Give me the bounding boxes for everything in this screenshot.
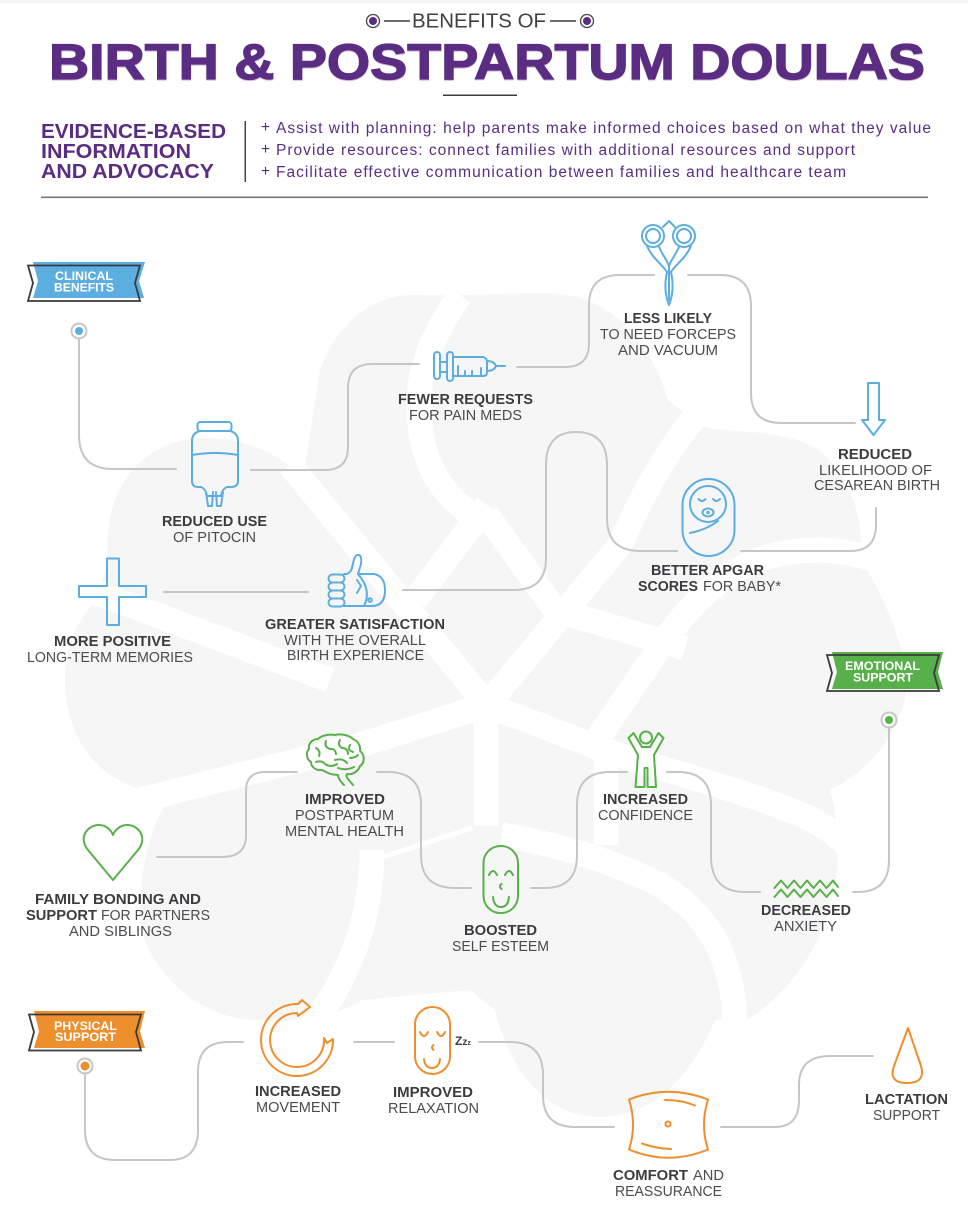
benefit: fewer requests for pain meds [398,352,533,424]
connector path: physical [85,1042,873,1160]
benefit: reduced use of pitocin [162,422,267,546]
label: CONFIDENCE [598,808,693,824]
banner: physical support [29,1011,145,1050]
label: REDUCED [838,447,912,463]
banner: emotional support [827,652,943,691]
benefit: lactation support [865,1028,948,1124]
banner: physical support: PHYSICAL [54,1019,117,1033]
heading: evidence-based information: INFORMATION [41,140,191,163]
icon: brain [307,734,364,785]
icon: heart [84,825,142,880]
label [265,617,445,664]
icon: sleeping face capsule [415,1007,450,1074]
label: LONG-TERM MEMORIES [27,650,193,666]
label [600,311,736,359]
label: MOVEMENT [256,1100,340,1116]
banner: emotional support: SUPPORT [853,670,914,684]
label: LESS LIKELY [624,311,712,327]
label [638,563,781,595]
label [285,792,404,840]
section: clinical benefits [27,221,940,666]
label: MENTAL HEALTH [285,824,404,840]
label: REDUCED USE [162,514,267,530]
label: FOR BABY* [703,579,781,595]
bullet list: Facilitate effective communication between families and healthcare team [276,164,846,181]
benefit: greater satisfaction with the overall birth experience [265,555,445,664]
icon: syringe [434,352,505,381]
label: BOOSTED [464,923,537,939]
icon: pillow [629,1092,708,1158]
icon: down arrow [862,383,885,435]
eyebrow: benefits of: BENEFITS OF [412,10,546,32]
bullet list: + [261,141,270,158]
label [761,903,851,935]
label: WITH THE OVERALL [284,633,426,649]
benefit: decreased anxiety [761,880,851,935]
bullet list: Assist with planning: help parents make informed choices based on what they value [276,120,931,137]
icon: plus cross [79,558,146,625]
label: AND SIBLINGS [69,924,172,940]
benefit: increased confidence [598,732,693,824]
benefit: more positive long-term memories [27,558,193,666]
label: IMPROVED [393,1085,473,1101]
heading: evidence-based information: AND ADVOCACY [41,160,214,183]
icon: iv bag [192,422,238,506]
main heading: BIRTH & POSTPARTUM DOULAS [49,34,925,90]
label [598,792,693,824]
label: TO NEED FORCEPS [600,327,736,343]
label: REASSURANCE [615,1184,722,1200]
title block [49,10,925,96]
label: INCREASED [255,1084,341,1100]
bullet list: + [261,163,270,180]
bullet list: + [261,119,270,136]
benefit: boosted self esteem [452,846,549,955]
label [452,923,549,955]
icon: smiling face capsule [484,846,518,913]
icon: zzz text: Zzz [455,1034,471,1048]
icon: circular arrow [261,1000,333,1076]
label: INCREASED [603,792,688,808]
eyebrow: benefits of [366,10,594,32]
label: LACTATION [865,1092,948,1108]
label: SUPPORT [26,908,97,924]
label: BIRTH EXPERIENCE [287,648,424,664]
label: RELAXATION [388,1101,479,1117]
label: POSTPARTUM [295,808,394,824]
bullet list [261,119,931,181]
icon: thumbs up [328,555,385,606]
label [398,392,533,424]
label: MORE POSITIVE [54,634,171,650]
icon: scissors forceps [642,221,695,305]
label [27,634,193,666]
label: IMPROVED [305,792,385,808]
start dot: physical [78,1058,92,1074]
label [255,1084,341,1116]
label [613,1168,724,1200]
banner: emotional support: EMOTIONAL [845,659,920,673]
banner: clinical benefits: CLINICAL [55,269,113,283]
label: CESAREAN BIRTH [814,478,940,494]
label: ANXIETY [774,919,837,935]
section: physical support [29,1000,948,1200]
panel: evidence-based information and advocacy [41,119,931,198]
heading: evidence-based information [41,120,226,183]
label [814,447,940,494]
benefit: improved relaxation [388,1007,479,1117]
label [388,1085,479,1117]
label [865,1092,948,1124]
heading: evidence-based information: EVIDENCE-BASED [41,120,226,143]
bullet list: Provide resources: connect families with additional resources and support [276,142,856,159]
benefit: reduced likelihood of cesarean birth [814,383,940,494]
connector path: clinical [79,275,876,592]
benefit: improved postpartum mental health [285,734,404,840]
benefit: better apgar scores for baby [638,479,781,595]
benefit: comfort and reassurance [613,1092,724,1200]
label: SCORES [638,579,698,595]
start dot: clinical [72,324,86,338]
icon: milk drop [893,1028,922,1083]
label: AND VACUUM [618,343,718,359]
connector path: emotional [157,727,889,892]
label: DECREASED [761,903,851,919]
start dot: emotional [882,712,896,728]
label: FOR PARTNERS [101,908,210,924]
label [162,514,267,546]
label: AND [693,1168,724,1184]
label: COMFORT [613,1168,688,1184]
banner: physical support: SUPPORT [55,1030,117,1044]
label: BETTER APGAR [651,563,765,579]
label: GREATER SATISFACTION [265,617,445,633]
label: FOR PAIN MEDS [409,408,522,424]
label: FEWER REQUESTS [398,392,533,408]
benefit: increased movement [255,1000,341,1116]
label: LIKELIHOOD OF [819,463,932,479]
benefit: family bonding and support [26,825,210,940]
icon: person arms raised [628,732,664,787]
background flower watermark [65,293,906,1117]
benefit: less likely to need forceps and vacuum [600,221,736,359]
icon: swaddled baby [682,479,734,556]
section: emotional support [26,652,943,955]
label: SELF ESTEEM [452,939,549,955]
label: FAMILY BONDING AND [35,892,201,908]
banner: clinical benefits: BENEFITS [54,280,114,294]
label [26,892,210,940]
label: SUPPORT [873,1108,940,1124]
icon: zigzag waves [774,880,838,897]
label: OF PITOCIN [173,530,256,546]
banner: clinical benefits [28,262,145,301]
